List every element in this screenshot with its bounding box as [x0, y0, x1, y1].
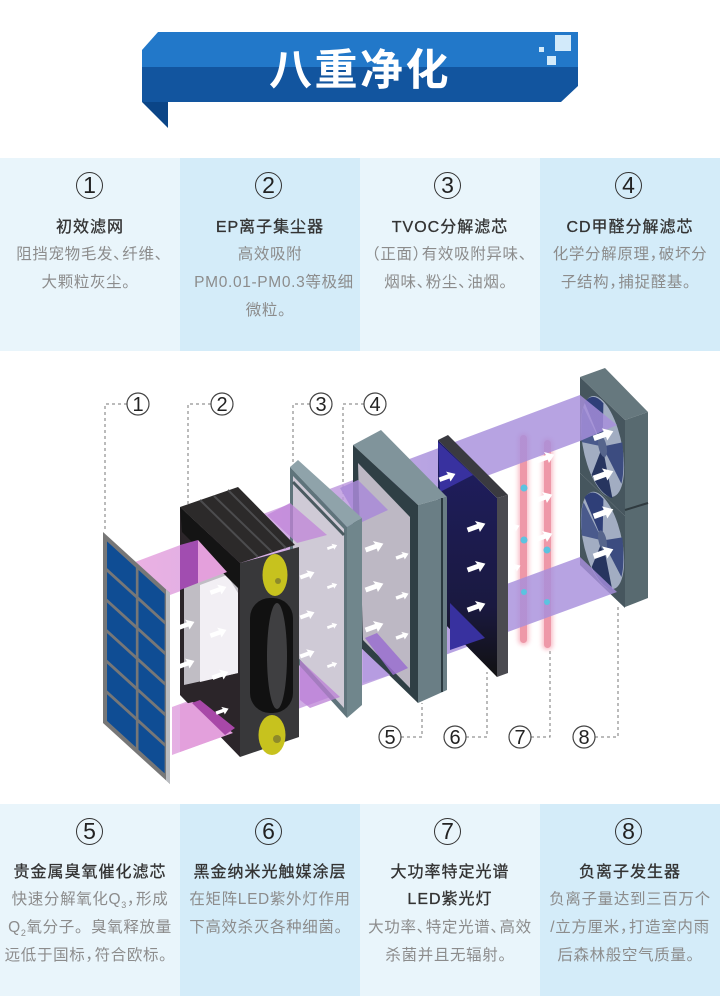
- callout 6: 6: [449, 727, 461, 749]
- description: 远低于国标，符合欧标。: [5, 947, 175, 964]
- part 8: double fan: [580, 368, 648, 608]
- callout 4: [364, 393, 386, 416]
- number 8: [615, 818, 642, 845]
- callout 5: 5: [384, 727, 396, 749]
- title banner: [142, 32, 578, 128]
- part 6: black nano coated panel: [438, 435, 508, 677]
- panel: TVOC分解滤芯: [360, 158, 540, 351]
- banner ribbon shape: [142, 32, 578, 128]
- part 2: EP ion collector unit: [177, 487, 299, 757]
- panel: 负离子发生器: [540, 804, 720, 996]
- panel: 初效滤网: [0, 158, 180, 351]
- description: [368, 918, 532, 964]
- part 5: precious metal filter frame: [340, 430, 447, 703]
- callout 8: [573, 726, 595, 749]
- callout 4: 4: [369, 394, 381, 416]
- number 3: 3: [441, 172, 454, 198]
- part 7: LED purple lamp tubes: [518, 433, 553, 650]
- panel: 大功率特定光谱LED紫光灯: [360, 804, 540, 996]
- description: 高效吸附: [238, 246, 302, 263]
- description: 下高效杀灭各种细菌。: [189, 919, 351, 936]
- panel: 黑金纳米光触媒涂层: [180, 804, 360, 996]
- exploded diagram of the eight filter layers: [103, 368, 648, 784]
- callout 1: [127, 393, 149, 416]
- description: /立方厘米，打造室内雨: [550, 919, 710, 936]
- description: （正面）有效吸附异味、: [364, 246, 535, 263]
- heading: 大功率特定光谱: [390, 864, 510, 881]
- number 6: 6: [262, 818, 275, 844]
- number 7: 7: [441, 818, 454, 844]
- callout 3: [310, 393, 332, 416]
- panel: 贵金属臭氧催化滤芯: [0, 804, 180, 996]
- dashed leader lines: [105, 404, 618, 737]
- heading: [390, 863, 510, 908]
- air flow beams: [135, 395, 617, 755]
- description: 在矩阵LED紫外灯作用: [189, 891, 351, 908]
- yellow latches: [258, 554, 288, 755]
- description: [553, 246, 707, 291]
- callout 7: [509, 726, 531, 749]
- number 2: 2: [262, 172, 275, 198]
- number 5: 5: [83, 818, 96, 844]
- description: [5, 890, 175, 964]
- callout 6: [444, 726, 466, 749]
- number 4: [615, 172, 642, 199]
- number 7: [434, 818, 461, 845]
- callout 2: 2: [216, 394, 228, 416]
- panel: EP离子集尘器: [180, 158, 360, 351]
- number 2: [255, 172, 282, 199]
- description: [189, 890, 351, 936]
- description: 微粒。: [246, 302, 294, 319]
- number 5: [76, 818, 103, 845]
- description: 子结构，捕捉醛基。: [561, 274, 699, 291]
- part 4 and 3: filter frame: [267, 460, 362, 718]
- description: [194, 246, 354, 319]
- part 1: pre-filter mesh: [103, 532, 170, 784]
- number 3: [434, 172, 461, 199]
- heading: 贵金属臭氧催化滤芯: [13, 864, 166, 881]
- description: 阻挡宠物毛发、纤维、: [16, 246, 171, 263]
- description: [549, 890, 711, 964]
- heading: EP离子集尘器: [216, 219, 324, 236]
- description: 负离子量达到三百万个: [549, 891, 711, 908]
- description: [364, 246, 535, 291]
- heading: 黑金纳米光触媒涂层: [193, 864, 346, 881]
- description: 化学分解原理，破坏分: [553, 246, 707, 263]
- number 8: 8: [622, 818, 635, 844]
- callout 7: 7: [514, 727, 526, 749]
- callout 2: [211, 393, 233, 416]
- banner heading: 八重净化: [269, 36, 451, 98]
- panel: CD甲醛分解滤芯: [540, 158, 720, 351]
- description: 大颗粒灰尘。: [42, 274, 138, 291]
- description: 烟味、粉尘、油烟。: [384, 274, 516, 291]
- arrows at lamps and fans: [506, 425, 616, 574]
- description: 后森林般空气质量。: [557, 947, 703, 964]
- description: 杀菌并且无辐射。: [385, 947, 515, 964]
- description: Q2氧分子。臭氧释放量: [8, 919, 172, 938]
- callout 3: 3: [315, 394, 327, 416]
- heading: LED紫光灯: [407, 891, 493, 908]
- callout 1: 1: [132, 394, 144, 416]
- heading: 负离子发生器: [579, 864, 681, 881]
- heading: 初效滤网: [56, 219, 124, 236]
- lamp highlights: [520, 484, 550, 605]
- handle: [250, 598, 293, 713]
- number 1: [76, 172, 103, 199]
- callout 5: [379, 726, 401, 749]
- heading: TVOC分解滤芯: [392, 219, 508, 236]
- description: PM0.01-PM0.3等极细: [194, 274, 354, 291]
- number 4: 4: [622, 172, 635, 198]
- number 1: 1: [83, 172, 96, 198]
- heading: CD甲醛分解滤芯: [566, 219, 694, 236]
- callout 8: 8: [578, 727, 590, 749]
- description: 快速分解氧化Q3，形成: [12, 891, 168, 910]
- description: [16, 246, 171, 291]
- description: 大功率、特定光谱、高效: [368, 919, 532, 936]
- number 6: [255, 818, 282, 845]
